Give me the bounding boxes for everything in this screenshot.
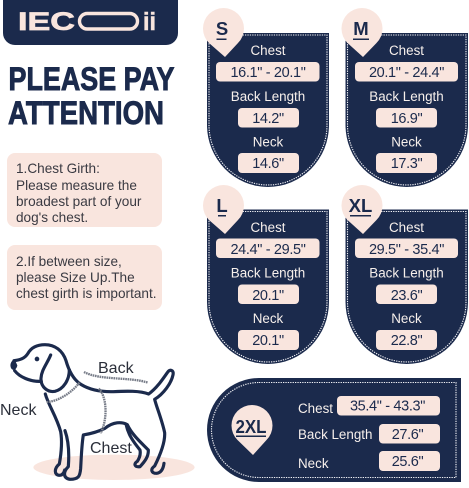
pin XL: [341, 185, 382, 234]
pin 2XL: 2XL: [236, 416, 266, 437]
panel: size S: 14.6": [252, 156, 284, 172]
panel: size 2XL: [207, 378, 461, 482]
panel: size M: 20.1" - 24.4": [369, 65, 444, 81]
diagram labels: Chest: [90, 440, 132, 457]
panel: size M: Neck: [391, 134, 422, 150]
panel: size 2XL: Chest: [298, 401, 333, 416]
note: size up: chest girth is important.: [16, 286, 157, 301]
pin 2XL: [232, 405, 272, 455]
panel: size M: Chest: [389, 43, 424, 58]
logo wordmark: [18, 8, 156, 36]
panel: size M: 17.3": [391, 156, 423, 172]
diagram labels: Neck: [0, 402, 37, 419]
diagram labels: [0, 360, 135, 457]
pin M: [341, 8, 382, 57]
note: chest girth: dog's chest.: [16, 210, 88, 225]
pin S: S: [216, 18, 228, 39]
logo banner: [3, 0, 178, 45]
panel: size XL: Chest: [389, 220, 424, 235]
note: chest girth: Please measure the: [16, 178, 137, 193]
panel: size XL: 29.5" - 35.4": [369, 242, 444, 258]
neck tape: [47, 382, 80, 402]
title: PLEASE PAY: [8, 61, 174, 97]
panel: size 2XL: Neck: [298, 456, 329, 471]
note: chest girth: [7, 153, 162, 227]
panel: size L: Chest: [251, 220, 286, 235]
panel: size XL: Neck: [391, 311, 422, 326]
panel: size XL: Back Length: [369, 266, 444, 280]
dog measuring diagram: [10, 345, 195, 480]
panel: size 2XL: Back Length: [298, 427, 372, 442]
panel: size S: 14.2": [252, 111, 284, 127]
panel: size L: Neck: [253, 311, 284, 326]
panel: size S: 16.1" - 20.1": [230, 65, 306, 81]
panel: size 2XL: 25.6": [392, 454, 424, 470]
logo wordmark: IEC: [18, 8, 75, 36]
panel: size S: [203, 8, 329, 187]
note: chest girth: broadest part of your: [16, 194, 142, 209]
panel: size L: 20.1": [252, 333, 284, 349]
panel: size XL: 22.8": [391, 333, 423, 349]
note: chest girth: 1.Chest Girth:: [16, 161, 100, 176]
logo wordmark: ii: [143, 8, 156, 36]
panel: size S: Neck: [253, 134, 284, 150]
panel: size 2XL: 27.6": [392, 427, 424, 443]
panel: size L: Back Length: [231, 266, 305, 280]
note: size up: please Size Up.The: [16, 270, 135, 285]
panel: size XL: [341, 185, 468, 364]
panel: size 2XL: 35.4" - 43.3": [350, 398, 425, 414]
panel: size L: 20.1": [252, 288, 284, 304]
panel: size S: Chest: [251, 43, 286, 58]
panel: size L: [203, 185, 329, 364]
back tape: [84, 372, 148, 383]
panel: size M: Back Length: [369, 89, 444, 104]
panel: size L: 24.4" - 29.5": [230, 242, 306, 258]
pin L: L: [216, 195, 228, 216]
panel: size M: [341, 8, 468, 187]
note: size up: [7, 245, 162, 310]
pin M: M: [353, 18, 369, 39]
pin L: [203, 185, 244, 234]
panel: size XL: 23.6": [391, 288, 423, 304]
pin XL: XL: [349, 195, 372, 216]
pin S: [203, 8, 244, 57]
panel: size M: 16.9": [391, 111, 423, 127]
chest tape: [99, 389, 106, 433]
diagram labels: Back: [98, 360, 135, 377]
note: size up: 2.If between size,: [16, 254, 122, 269]
title: ATTENTION: [8, 95, 164, 131]
title: [8, 61, 174, 131]
panel: size S: Back Length: [231, 89, 305, 104]
